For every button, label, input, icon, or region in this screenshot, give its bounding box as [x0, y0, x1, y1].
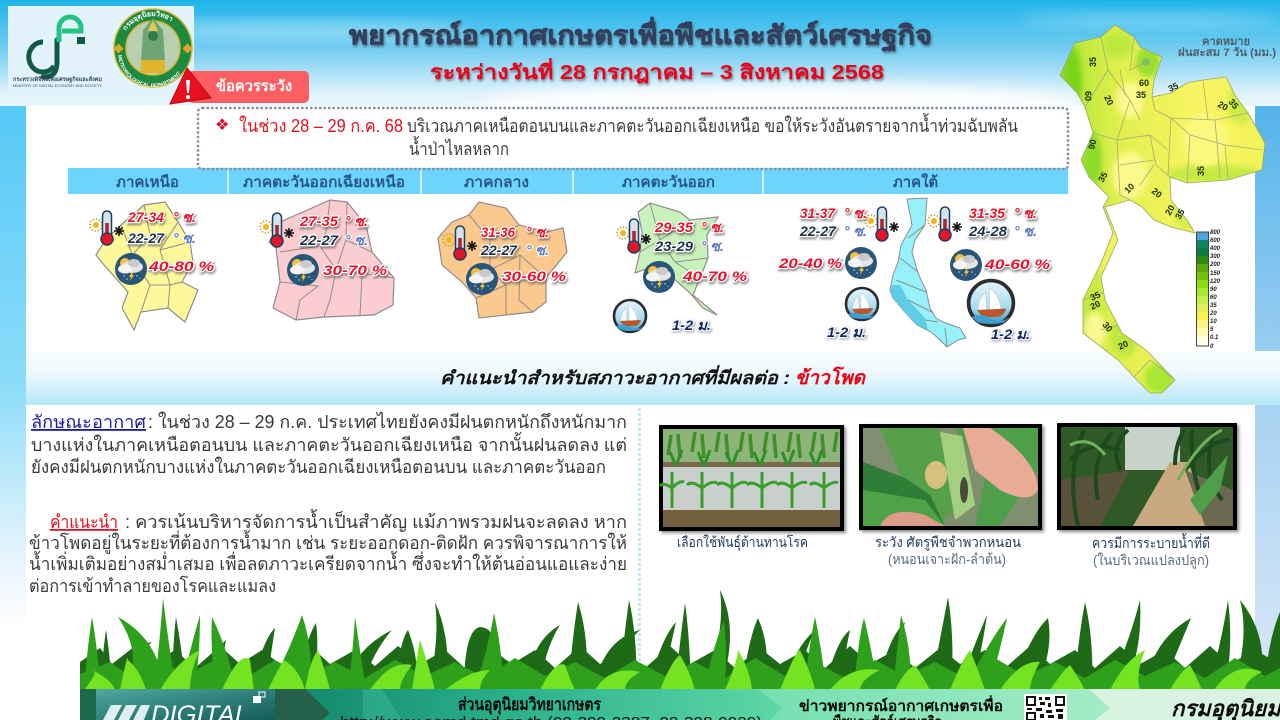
icon: thermometer: [260, 213, 294, 247]
rainfall colour scale: 90: [1210, 287, 1217, 293]
icon: rain cloud: [643, 261, 675, 293]
left: wave height: 1-2 ม.: [827, 324, 866, 340]
rainfall contour labels: 20: [1102, 94, 1115, 107]
rainfall colour scale: 35: [1210, 303, 1217, 309]
warning text box: [198, 108, 1068, 169]
rain chance: 40-80 %: [148, 258, 215, 274]
icon: meteorological department seal: [113, 8, 193, 88]
rainfall colour scale: 400: [1209, 246, 1221, 252]
icon: boat: [614, 300, 646, 332]
recommendation text: คำแนะนำ: [50, 512, 118, 532]
rainfall contour labels: 90: [1086, 138, 1099, 151]
weather description text: บางแห่งในภาคเหนือตอนบน และภาคตะวันออกเฉียงเหนือ จากนั้นฝนลดลง แต่: [31, 432, 627, 455]
recommendation text: ข้าวโพดอยู่ในระยะที่ต้องการน้ำมาก เช่น ระยะออกดอก-ติดฝัก ควรพิจารณาการให้: [29, 530, 627, 554]
warning text box: น้ำป่าไหลหลาก: [409, 136, 509, 159]
right blue side strip: [1255, 106, 1280, 720]
footer section: forecast news and QR code: [740, 689, 1110, 720]
rainfall colour scale: 60: [1210, 295, 1217, 301]
low temperature: ° ซ.: [526, 242, 549, 258]
warning label: [170, 68, 309, 104]
right: low temperature: [968, 223, 1037, 239]
icon: right thermometer: [928, 207, 962, 241]
warning text box: บริเวณภาคเหนือตอนบนและภาคตะวันออกเฉียงเหนือ ขอให้ระวังอันตรายจากน้ำท่วมฉับพลัน: [407, 113, 1018, 136]
left: low temperature: ° ซ.: [844, 223, 867, 239]
advice heading band: คำแนะนำสำหรับสภาวะอากาศที่มีผลต่อ :: [440, 365, 790, 388]
right: high temperature: [969, 205, 1037, 221]
weather description text: ลักษณะอากาศ: [31, 412, 147, 432]
footer section: digital logo: [96, 689, 275, 720]
recommendation text: [29, 509, 627, 596]
icon: thermometer: [90, 211, 124, 245]
high temperature: [127, 209, 196, 225]
photo captions: [677, 533, 1210, 569]
panel: northeast region: [260, 200, 394, 320]
rainfall colour scale: 5: [1210, 327, 1214, 333]
right: high temperature: 31-35: [969, 205, 1005, 221]
high temperature: ° ซ.: [526, 224, 549, 240]
rainfall map of Thailand: [1060, 24, 1266, 394]
rainfall contour labels: 20: [1150, 186, 1164, 200]
low temperature: [299, 232, 368, 248]
right: rain chance: 40-60 %: [984, 256, 1051, 272]
rainfall contour labels: 35: [1167, 81, 1180, 94]
map: northeast: [269, 200, 394, 320]
low temperature: [654, 238, 724, 254]
rainfall colour scale: 0: [1210, 344, 1214, 350]
map: south: [890, 198, 966, 347]
icon: ministry logo: MINISTRY OF DIGITAL ECONOMY AND SOCIETY: [13, 84, 102, 88]
region header bar: [68, 168, 1068, 194]
icon: rain cloud: [466, 263, 498, 295]
rainfall colour scale: 120: [1210, 279, 1221, 285]
rainfall colour scale: 10: [1210, 319, 1217, 325]
rainfall contour labels: 20: [1163, 203, 1177, 217]
rainfall contour labels: 20: [1089, 299, 1102, 312]
rainfall legend title: [1178, 36, 1276, 59]
rainfall contour labels: 30: [1100, 320, 1115, 334]
rainfall legend title: ฝนสะสม 7 วัน (มม.): [1178, 46, 1276, 59]
photo captions: (หนอนเจาะฝัก-ลำต้น): [888, 551, 1006, 567]
panel: east region: [614, 203, 748, 333]
icon: left boat: [846, 288, 878, 320]
footer bar: [80, 689, 1280, 720]
high temperature: 31-36: [481, 224, 515, 240]
panel: central region: [438, 202, 567, 318]
icon: warning triangle: [170, 68, 211, 104]
right: high temperature: ° ซ.: [1014, 205, 1037, 221]
left blue side strip: [0, 106, 26, 720]
rainfall contour labels: 35: [1173, 207, 1187, 221]
high temperature: ° ซ.: [173, 209, 196, 225]
rainfall contour labels: [1083, 57, 1241, 352]
low temperature: 22-27: [299, 232, 339, 248]
rainfall colour scale: 300: [1210, 254, 1221, 260]
low temperature: ° ซ.: [701, 238, 724, 254]
region header bar: ภาคตะวันออกเฉียงเหนือ: [243, 174, 405, 191]
high temperature: [299, 213, 368, 229]
left: rain chance: 20-40 %: [778, 255, 843, 271]
map: east: [635, 203, 718, 315]
photo: drainage furrow: [1057, 423, 1237, 530]
grass strip: [80, 590, 1280, 690]
footer section: agromet division: ส่วนอุตุนิยมวิทยาเกษตร: [458, 695, 602, 715]
low temperature: ° ซ.: [345, 232, 368, 248]
rain chance: 30-70 %: [323, 262, 388, 278]
warning label: ข้อควรระวัง: [216, 78, 292, 95]
rainfall colour scale: 0.1: [1210, 335, 1219, 341]
map: north: [96, 202, 198, 330]
photo captions: (ในบริเวณแปลงปลูก): [1093, 552, 1209, 569]
warning text box: ในช่วง 28 – 29 ก.ค. 68: [239, 115, 403, 136]
weather description text: ยังคงมีฝนตกหนักบางแห่งในภาคตะวันออกเฉียงเหนือตอนบน และภาคตะวันออก: [31, 456, 606, 477]
icon: ministry logo: [13, 17, 102, 88]
recommendation text: น้ำเพิ่มเติมอย่างสม่ำเสมอ เพื่อลดภาวะเครียดจากน้ำ ซึ่งจะทำให้ต้นอ่อนแอและง่าย: [29, 551, 627, 574]
logos box: [8, 6, 194, 92]
icon: rain cloud: [287, 254, 319, 286]
icon: thermometer: [443, 226, 477, 260]
left: low temperature: [799, 223, 867, 239]
icon: left thermometer: [865, 207, 899, 241]
rainfall colour scale: 20: [1209, 311, 1217, 317]
panel: north region: [90, 202, 215, 330]
low temperature: 23-29: [654, 238, 693, 254]
footer section: forecast news and QR code: ข่าวพยากรณ์อากาศเกษตรเพื่อ: [799, 695, 1003, 715]
photo: corn seedlings: [659, 425, 844, 531]
photo captions: ระวัง ศัตรูพืชจำพวกหนอน: [875, 534, 1021, 551]
right: low temperature: 24-28: [968, 223, 1007, 239]
region header bar: ภาคใต้: [893, 173, 938, 191]
icon: thermometer: [617, 219, 651, 253]
weather description text: : ในช่วง 28 – 29 ก.ค. ประเทศไทยยังคงมีฝนตกหนักถึงหนักมาก: [148, 411, 627, 432]
region header bar: ภาคตะวันออก: [622, 174, 715, 191]
low temperature: ° ซ.: [173, 230, 196, 246]
background sky header: [0, 0, 1280, 124]
rainfall colour scale: 150: [1210, 271, 1221, 277]
icon: meteorological department seal: กรมอุตุนิยมวิทยา: [123, 10, 172, 30]
icon: meteorological department seal: METEOROLOGICAL DEPARTMENT: [118, 55, 180, 87]
region header bar: ภาคเหนือ: [116, 174, 179, 191]
rainfall colour scale: 200: [1209, 262, 1221, 268]
weather description text: [31, 411, 627, 477]
high temperature: [654, 219, 724, 235]
footer section: agromet division: [275, 689, 782, 720]
rainfall contour labels: 10: [1122, 181, 1136, 195]
wave height: 1-2 ม.: [672, 317, 711, 333]
rain chance: 40-70 %: [682, 268, 748, 284]
icon: left rain cloud: [845, 247, 877, 279]
subtitle: date range: ระหว่างวันที่ 28 กรกฎาคม – 3 สิงหาคม 2568: [430, 57, 884, 84]
left: low temperature: 22-27: [799, 223, 837, 239]
right: low temperature: ° ซ.: [1014, 223, 1037, 239]
icon: ministry logo: กระทรวงดิจิทัลเพื่อเศรษฐกิจและสังคม: [13, 75, 102, 83]
panel: south region: [778, 198, 1051, 347]
rainfall contour labels: 20: [1117, 339, 1130, 352]
rainfall contour labels: 35: [1089, 290, 1102, 303]
photo captions: เลือกใช้พันธุ์ต้านทานโรค: [677, 534, 808, 551]
rainfall contour labels: 60: [1139, 78, 1149, 88]
icon: QR code: [1024, 694, 1067, 720]
high temperature: [481, 224, 549, 240]
icon: right boat: [969, 281, 1013, 325]
high temperature: 27-34: [127, 209, 164, 225]
advice heading band: ข้าวโพด: [795, 366, 867, 389]
rainfall legend title: คาดหมาย: [1202, 36, 1250, 48]
icon: rain cloud: [115, 253, 147, 285]
icon: diamond bullet: ❖: [215, 115, 229, 134]
rain chance: 30-60 %: [502, 268, 567, 284]
rainfall contour labels: 35: [1226, 97, 1241, 111]
high temperature: ° ซ.: [701, 219, 724, 235]
rainfall colour scale: 600: [1210, 238, 1221, 244]
footer section: department name: [1080, 689, 1280, 720]
rainfall colour scale: 800: [1210, 230, 1221, 236]
low temperature: 22-27: [480, 242, 518, 258]
recommendation text: : ควรเน้นบริหารจัดการน้ำเป็นสำคัญ แม้ภาพรวมฝนจะลดลง หาก: [125, 509, 627, 532]
photo captions: ควรมีการระบายน้ำที่ดี: [1092, 533, 1210, 551]
left: high temperature: ° ซ.: [844, 205, 867, 221]
high temperature: 29-35: [654, 219, 693, 235]
left: high temperature: [800, 205, 867, 221]
advice heading band: [26, 351, 1280, 405]
title: พยากรณ์อากาศเกษตรเพื่อพืชและสัตว์เศรษฐกิจ: [349, 16, 932, 53]
high temperature: 27-35: [299, 213, 338, 229]
rainfall contour labels: 60: [1083, 91, 1093, 101]
low temperature: [480, 242, 549, 258]
rainfall contour labels: 35: [1096, 170, 1110, 184]
left: high temperature: 31-37: [800, 205, 836, 221]
icon: right rain cloud: [950, 249, 982, 281]
rainfall contour labels: 35: [1136, 90, 1146, 100]
low temperature: 22-27: [127, 230, 165, 246]
rainfall colour scale: [1196, 230, 1221, 350]
rainfall contour labels: 35: [1196, 166, 1206, 176]
right: wave height: 1-2 ม.: [991, 326, 1030, 342]
low temperature: [127, 230, 196, 246]
photo: worm on corn: [859, 424, 1042, 530]
region header bar: ภาคกลาง: [464, 174, 529, 191]
map: central: [438, 202, 567, 318]
recommendation text: ต่อการเข้าทำลายของโรคและแมลง: [29, 575, 276, 596]
rainfall contour labels: 35: [1088, 57, 1098, 67]
high temperature: ° ซ.: [345, 213, 368, 229]
rainfall contour labels: 20: [1216, 99, 1230, 113]
